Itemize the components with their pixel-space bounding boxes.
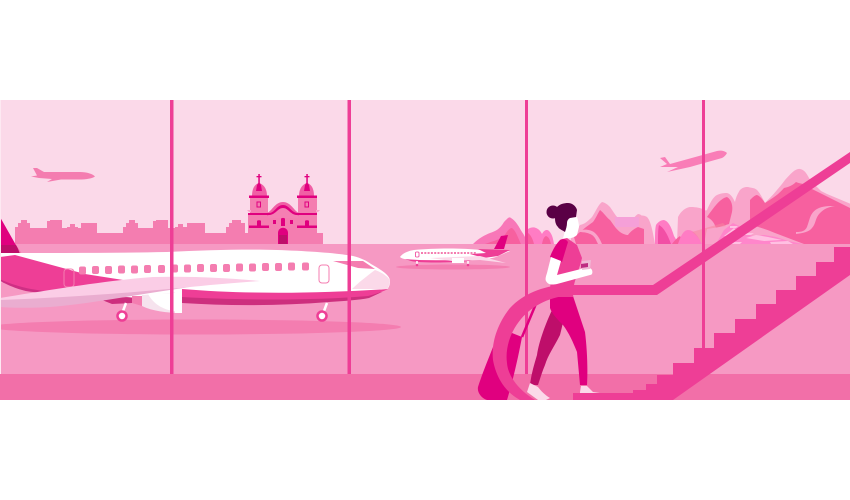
church details: [248, 174, 317, 244]
church right dome: [299, 183, 314, 196]
church: [247, 174, 320, 244]
church towers: [248, 198, 317, 234]
main plane shadow: [0, 320, 401, 334]
mountains right, mid: [750, 182, 850, 244]
distant plane tail: [494, 235, 508, 249]
suitcase: [478, 299, 538, 400]
suitcase body: [478, 331, 522, 400]
mountain, dark inner peak: [707, 197, 732, 228]
back leg: [530, 310, 563, 385]
distant plane wing: [430, 256, 506, 263]
left window edge: [0, 100, 1, 374]
church gable: [268, 205, 298, 218]
person: [527, 203, 600, 400]
church door: [279, 235, 287, 244]
mountain group behind person: [528, 227, 554, 244]
tail fin: [0, 217, 21, 254]
floor band: [0, 374, 850, 400]
city skyline: [15, 220, 323, 244]
fuselage: [0, 250, 390, 303]
ruins terraces: [716, 223, 804, 244]
front shoe: [580, 386, 600, 393]
distant plane stripe: [470, 249, 510, 258]
small airplane in sky, left: [31, 168, 95, 182]
sky background: [0, 100, 850, 245]
large airplane in sky, right: [660, 151, 727, 172]
nose: [352, 270, 390, 289]
mountain, centre back: [473, 217, 527, 244]
distant plane body: [400, 248, 510, 260]
rear door: [64, 269, 74, 287]
staircase: [573, 247, 850, 400]
belly stripe: [182, 292, 382, 305]
hair bun: [546, 206, 560, 218]
mountains centre: [473, 202, 650, 244]
church eaves: [247, 210, 320, 212]
windows: [79, 262, 309, 274]
mountain light path: [579, 230, 602, 244]
church left dome: [252, 183, 267, 196]
distant plane windows: [421, 252, 476, 254]
sleeve: [550, 239, 568, 262]
wing: [0, 277, 260, 307]
church tower windows: [257, 202, 308, 207]
wheels: [118, 312, 126, 320]
engine pylon: [132, 296, 142, 306]
neck and face: [563, 217, 579, 238]
cockpit window: [333, 261, 375, 269]
mountains right, river: [796, 206, 835, 234]
engine stripe on tail section: [0, 255, 130, 291]
mountain, centre front: [485, 228, 521, 244]
back shoe: [527, 383, 550, 400]
mountains far right: [677, 169, 850, 244]
floor: [0, 244, 850, 374]
escalator handrail: [493, 152, 850, 400]
mountains near, small peaks: [636, 216, 655, 244]
landing gear: [123, 303, 327, 311]
engine: [142, 292, 182, 313]
window frames: [170, 100, 705, 374]
phone: [581, 260, 591, 270]
distant plane gear: [417, 261, 468, 265]
hair: [555, 203, 577, 232]
distant plane shadow: [396, 264, 510, 270]
front door: [319, 265, 329, 283]
lower rear fuselage shadow: [97, 297, 132, 304]
arm: [546, 257, 592, 285]
mountain, large behind person: [570, 202, 650, 244]
distant airplane: [400, 235, 510, 266]
front leg: [550, 296, 587, 385]
suitcase handle: [522, 299, 538, 337]
main airplane: [0, 217, 390, 320]
lilac ruins, distant: [615, 217, 639, 227]
distant plane door: [416, 252, 419, 257]
torso shirt: [550, 238, 582, 297]
